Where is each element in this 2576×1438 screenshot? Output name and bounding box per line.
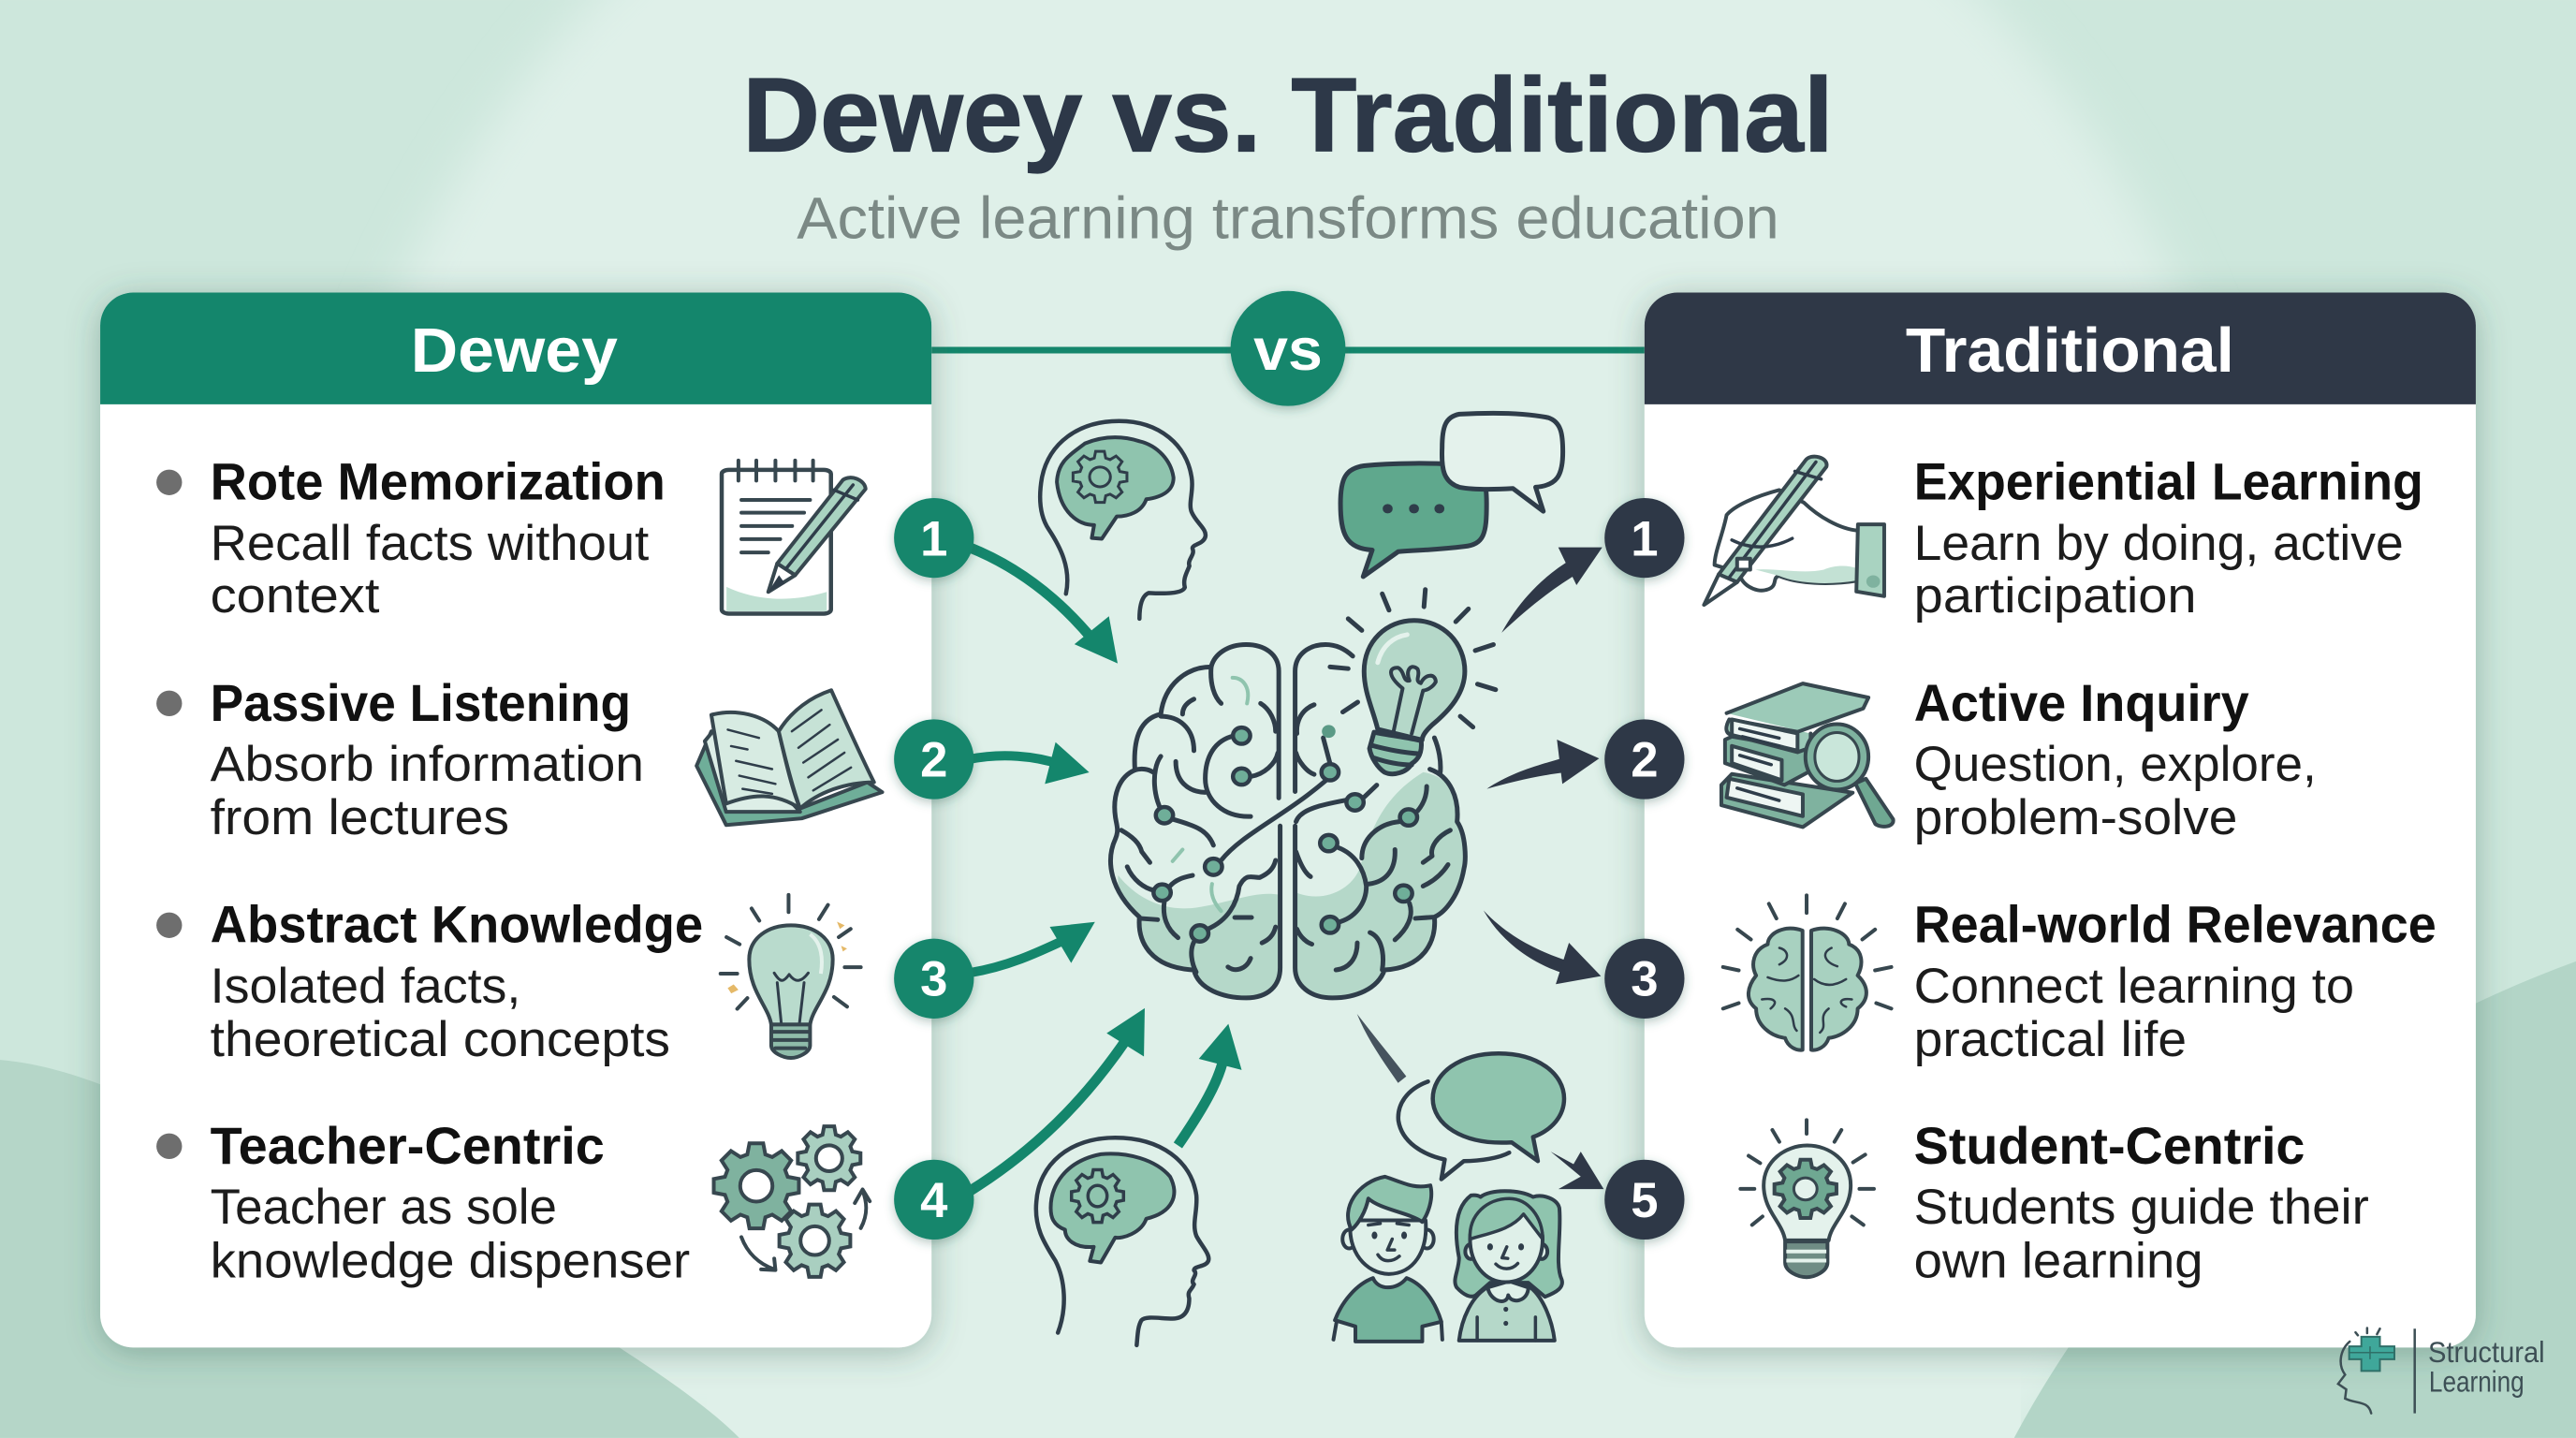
title: Dewey vs. Traditional [742, 56, 1834, 174]
logo: Structural Learning: Learning [2429, 1365, 2525, 1399]
children [1334, 1177, 1562, 1342]
item: Abstract Knowledge: Isolated facts, [211, 959, 520, 1014]
item: Passive Listening [156, 674, 644, 845]
logo: Structural Learning [2338, 1328, 2545, 1414]
speech bubbles, bottom [1398, 1053, 1564, 1180]
speech bubbles, top [1340, 413, 1563, 577]
logo: Structural Learning: Structural [2428, 1335, 2545, 1369]
item: Passive Listening: Absorb information [211, 737, 644, 792]
girl [1455, 1191, 1562, 1341]
vs connector line [920, 346, 1660, 353]
item: Real-world Relevance: Real-world Relevance [1914, 896, 2437, 954]
vs badge: vs [1253, 317, 1323, 383]
subtitle: Active learning transforms education [797, 186, 1779, 252]
icon: hand writing [1704, 457, 1884, 605]
numbered badges: Traditional: 5 [1631, 1173, 1658, 1228]
numbered badges: Traditional [1604, 498, 1685, 1240]
item: Student-Centric: Students guide their [1914, 1180, 2369, 1235]
item: Teacher-Centric: knowledge dispenser [211, 1234, 690, 1289]
item: Active Inquiry: Question, explore, [1914, 737, 2317, 792]
item: Active Inquiry: Active Inquiry [1914, 674, 2249, 732]
arrow: brain to traditional 1 [1501, 548, 1603, 633]
icon: light bulb [721, 895, 861, 1058]
item: Rote Memorization: Rote Memorization [211, 453, 666, 511]
numbered badges: Dewey: 3 [920, 952, 947, 1007]
item: Rote Memorization: Recall facts without [211, 516, 650, 571]
vs badge [1231, 291, 1345, 406]
item: Experiential Learning: participation [1914, 568, 2197, 624]
arrow: 3 left to brain [970, 922, 1095, 973]
item: Teacher-Centric [156, 1117, 690, 1289]
head with gear, bottom [1036, 1137, 1208, 1345]
numbered badges: Dewey: 4 [920, 1173, 947, 1228]
arrow: brain to traditional 5 [1357, 1014, 1603, 1189]
numbered badges: Traditional: 1 [1631, 511, 1658, 566]
Dewey header [100, 293, 931, 404]
icon: books and magnifying glass [1721, 683, 1894, 827]
arrow: 2 left to brain [970, 742, 1090, 784]
central brain with circuits [1111, 644, 1465, 998]
arrow: brain to traditional 2 [1486, 740, 1599, 789]
item: Teacher-Centric: Teacher-Centric [211, 1117, 605, 1175]
numbered badges: Traditional: 2 [1631, 732, 1658, 787]
light bulb over brain [1348, 590, 1496, 774]
arrow: 1 left to brain [970, 548, 1118, 664]
item: Real-world Relevance: practical life [1914, 1012, 2187, 1067]
item: Student-Centric: Student-Centric [1914, 1117, 2305, 1175]
item: Experiential Learning: Learn by doing, active [1914, 516, 2404, 571]
icon: bulb with gear [1740, 1120, 1874, 1277]
head with gear, top [1040, 421, 1206, 619]
item: Real-world Relevance: Connect learning to [1914, 959, 2354, 1014]
item: Rote Memorization: context [211, 568, 380, 624]
boy [1334, 1177, 1442, 1342]
numbered badges: Dewey [894, 498, 973, 1240]
item: Teacher-Centric: Teacher as sole [211, 1180, 557, 1235]
icon: open book [696, 690, 882, 825]
Traditional header [1645, 293, 2476, 404]
numbered badges: Dewey: 2 [920, 732, 947, 787]
Dewey header: Dewey [411, 316, 618, 386]
item: Experiential Learning: Experiential Learning [1914, 453, 2423, 511]
item: Passive Listening: from lectures [211, 790, 509, 845]
Traditional header: Traditional [1906, 316, 2234, 386]
icon: brain with rays [1723, 895, 1892, 1050]
item: Abstract Knowledge: Abstract Knowledge [211, 896, 703, 954]
arrow: 4 left to brain [970, 1008, 1145, 1192]
item: Student-Centric: own learning [1914, 1234, 2203, 1289]
icon: notepad and pencil [722, 461, 866, 613]
item: Rote Memorization [156, 453, 666, 624]
arrow: brain to traditional 3 [1484, 910, 1601, 984]
panel: Traditional [1645, 293, 2476, 1347]
item: Student-Centric [1914, 1117, 2369, 1289]
item: Passive Listening: Passive Listening [211, 674, 631, 732]
item: Active Inquiry [1914, 674, 2317, 845]
panel: Dewey [100, 293, 931, 1347]
item: Real-world Relevance [1914, 896, 2437, 1067]
numbered badges: Dewey: 1 [920, 511, 947, 566]
numbered badges: Traditional: 3 [1631, 952, 1658, 1007]
item: Abstract Knowledge: theoretical concepts [211, 1012, 670, 1067]
item: Abstract Knowledge [156, 896, 703, 1067]
icon: gears [714, 1126, 870, 1277]
arrow: lower head to brain [1178, 1024, 1242, 1145]
item: Active Inquiry: problem-solve [1914, 790, 2237, 845]
item: Experiential Learning [1914, 453, 2423, 624]
